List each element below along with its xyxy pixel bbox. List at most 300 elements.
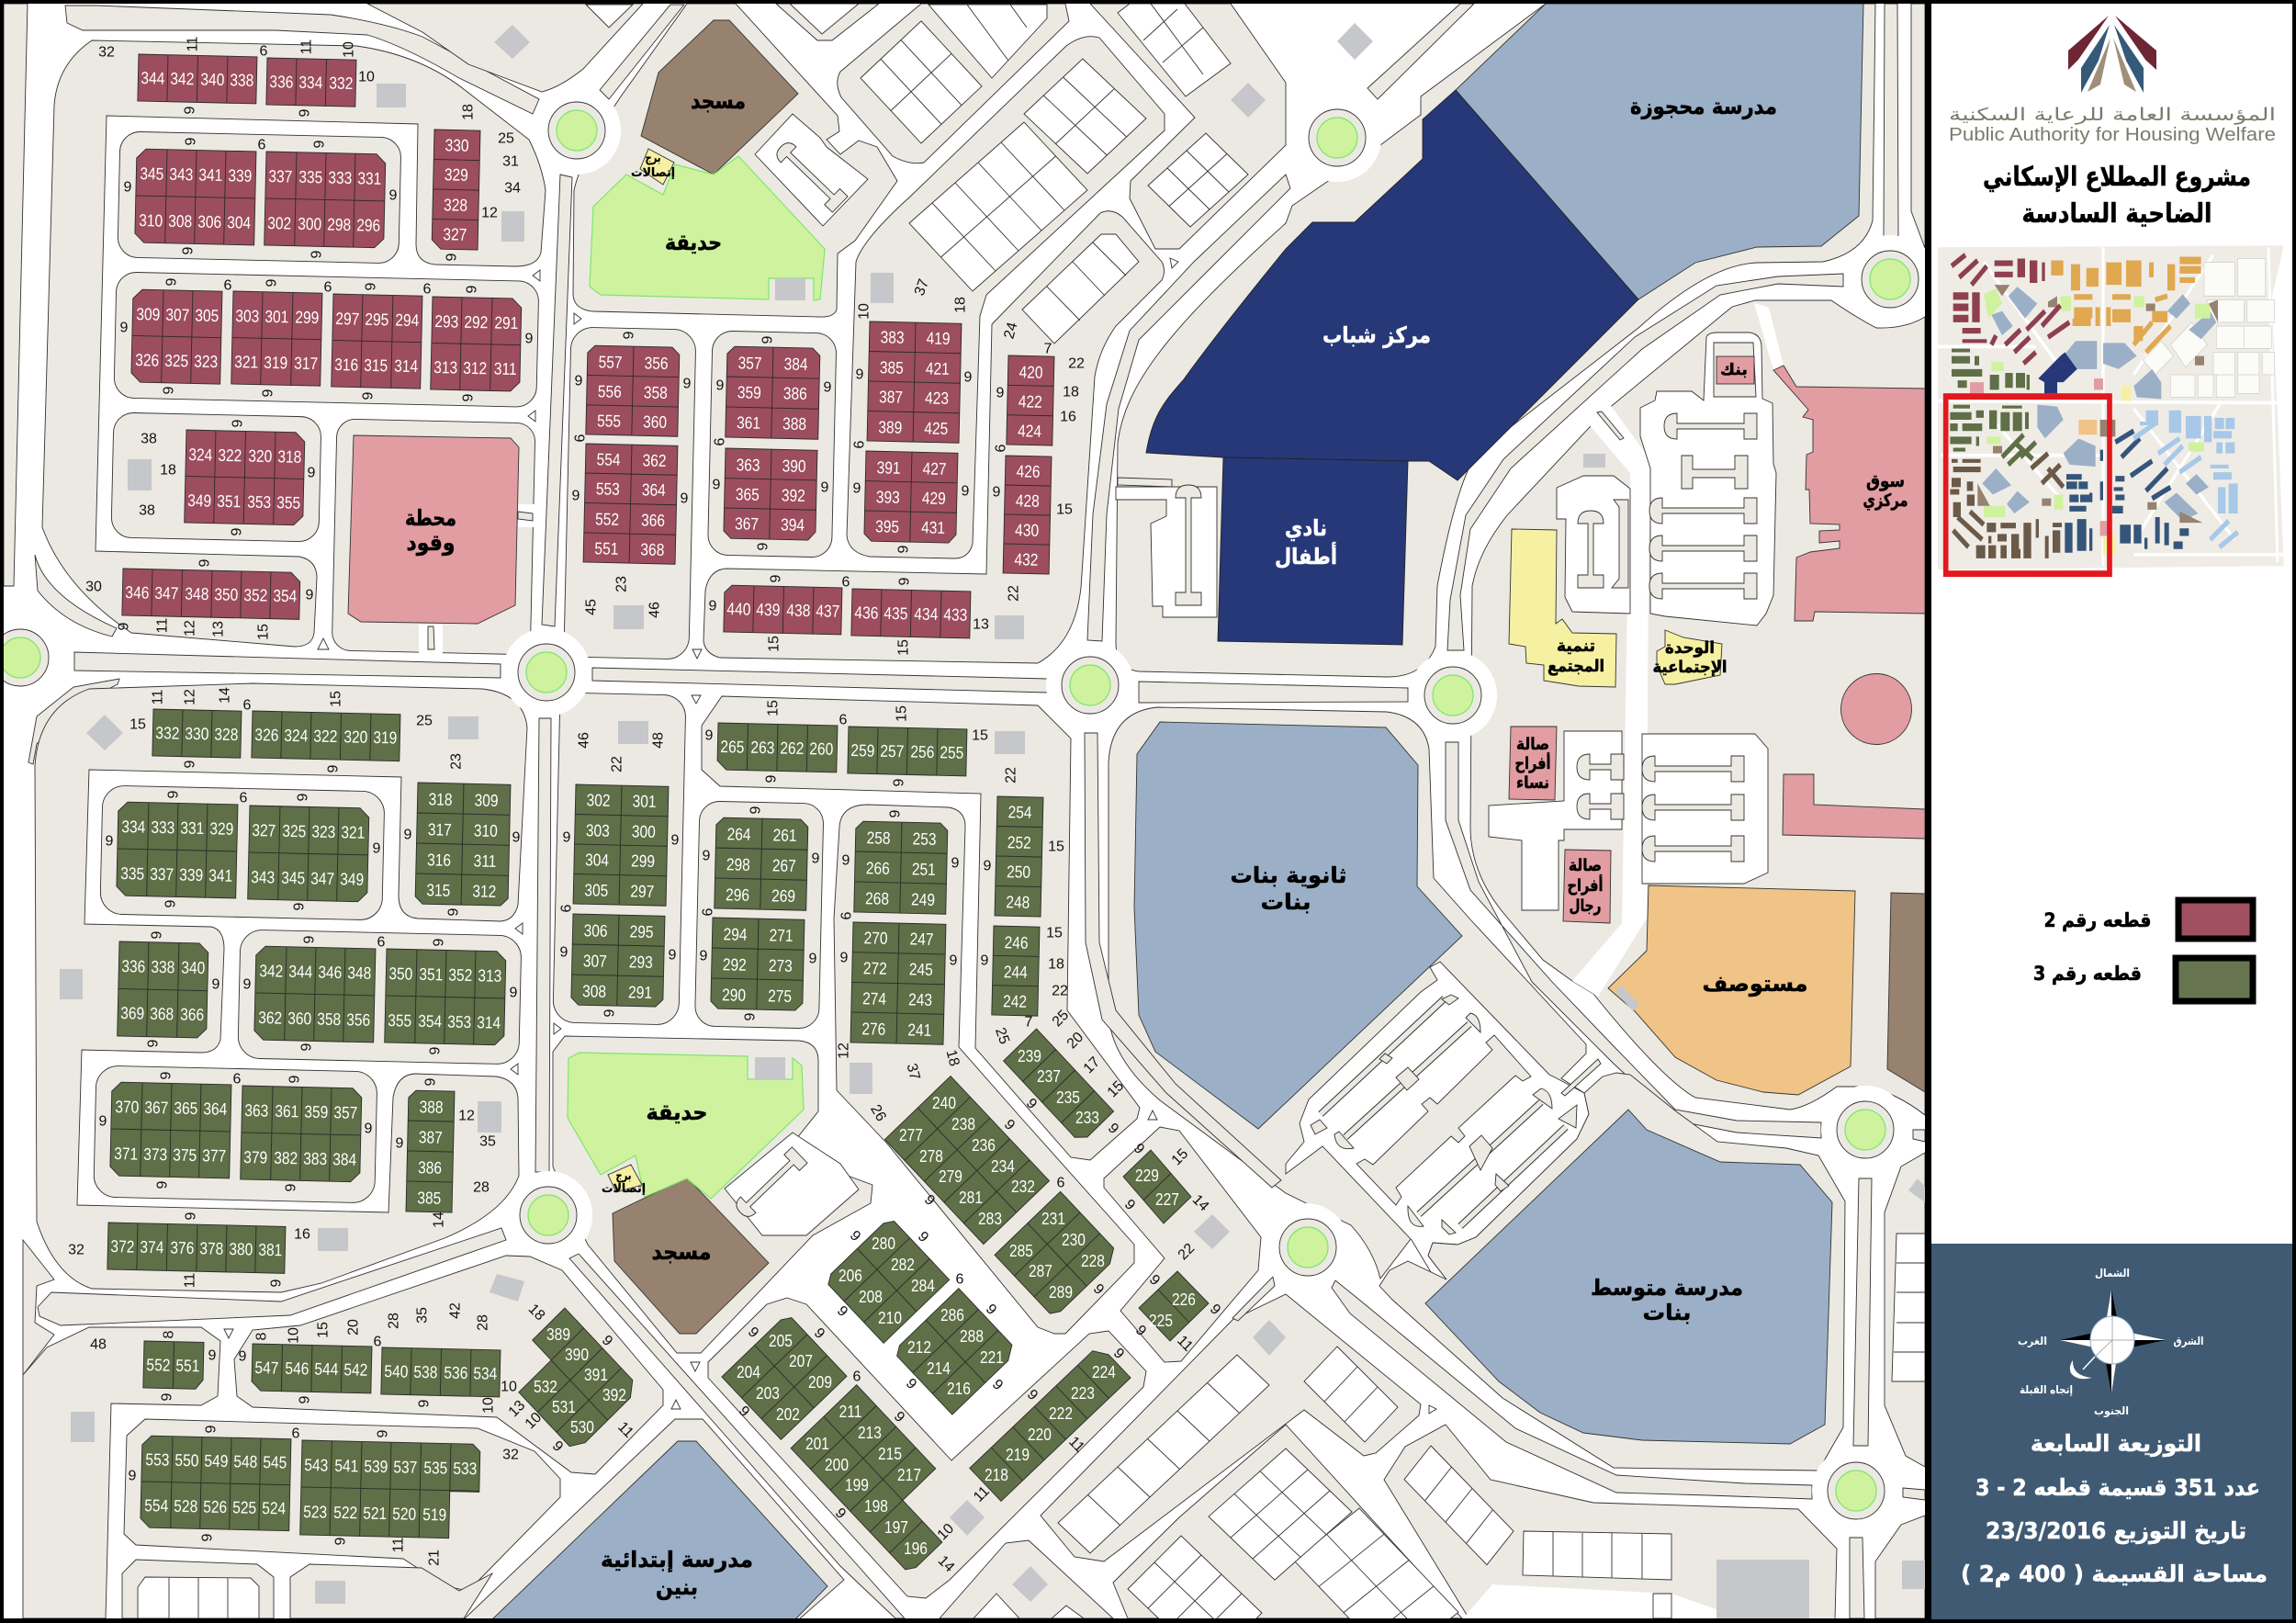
gray box in north park xyxy=(775,278,805,300)
lots: 436-433: 436 xyxy=(854,603,879,623)
dimension labels vertical: 45 xyxy=(584,599,599,615)
lots: diagonal 240-283: 283 xyxy=(978,1210,1002,1228)
label: boys primary school: مدرسة إبتدائية xyxy=(601,1547,753,1572)
dimension labels horizontal: 9 xyxy=(962,483,970,500)
lots: 553-524: 545 xyxy=(263,1453,287,1472)
lots: block 3 row 332-328: 330 xyxy=(185,725,209,744)
lots: 547-542: 546 xyxy=(285,1359,310,1379)
lots: diagonal 211-196: 199 xyxy=(845,1476,869,1494)
organisation name english: Public Authority for Housing Welfare xyxy=(1949,125,2276,145)
key map xyxy=(1938,245,2284,574)
dimension labels vertical: 9 xyxy=(180,246,197,254)
label: fuel station: محطة xyxy=(405,505,456,531)
lots: 270-241 xyxy=(850,922,946,1044)
lots: 270-241: 247 xyxy=(909,930,934,949)
dimension labels horizontal: 9 xyxy=(243,977,252,992)
plot area: مساحة القسيمة ( 400 م2 ) xyxy=(1961,1561,2268,1587)
dimension labels diagonal: 9 xyxy=(989,1377,1006,1393)
lots: 440-437: 440 xyxy=(726,600,751,619)
dimension labels diagonal: 9 xyxy=(1001,1117,1018,1133)
dimension labels vertical: 9 xyxy=(621,331,637,339)
lots: 388-385: 388 xyxy=(419,1098,444,1117)
lots: diagonal 389-530: 389 xyxy=(546,1325,570,1344)
dimension labels horizontal: 6 xyxy=(853,1369,861,1385)
lots: 303-317: 303 xyxy=(235,307,260,326)
lots: 543-519: 519 xyxy=(422,1505,446,1525)
dimension labels vertical: 9 xyxy=(162,386,176,394)
lots: diagonal 286-216: 216 xyxy=(947,1380,971,1398)
lots: 264-269: 269 xyxy=(771,886,795,906)
lots: block 2 row 344-338: 338 xyxy=(230,71,254,90)
dimension labels horizontal: 9 xyxy=(856,367,864,382)
lots: 388-385 xyxy=(406,1090,455,1212)
dimension labels horizontal: 9 xyxy=(951,856,960,871)
lots: 426-432: 430 xyxy=(1015,521,1039,540)
lots: diagonal 211-196: 196 xyxy=(904,1539,928,1558)
lots: 557-360: 358 xyxy=(644,383,668,402)
dimension labels horizontal: 9 xyxy=(705,727,714,744)
lots: 324-355: 318 xyxy=(277,447,302,467)
lots: 547-542: 544 xyxy=(314,1359,339,1379)
lots: 337-296: 302 xyxy=(267,214,291,233)
lots: 372-381: 380 xyxy=(229,1240,253,1259)
lots: block 3 row 332-328: 328 xyxy=(214,725,239,744)
lots: 543-519: 541 xyxy=(334,1457,359,1476)
dimension labels horizontal: 34 xyxy=(504,180,521,197)
lots: 554-368: 552 xyxy=(595,510,619,529)
lots: 297-314: 315 xyxy=(364,356,388,376)
dimension labels vertical: 15 xyxy=(895,705,909,722)
lots: 363-384: 379 xyxy=(243,1148,267,1167)
lots: diagonal 205-202: 209 xyxy=(808,1373,832,1392)
lots: 543-519: 522 xyxy=(333,1504,357,1523)
lots: 553-524: 528 xyxy=(174,1497,197,1516)
dimension labels diagonal: 9 xyxy=(1207,1302,1223,1318)
dimension labels horizontal: 48 xyxy=(90,1337,107,1352)
lots: 357-388: 359 xyxy=(737,383,761,402)
lots: 334-341: 335 xyxy=(120,864,144,884)
lots: diagonal 239-233 xyxy=(1004,1029,1114,1144)
lots: 391-431: 427 xyxy=(922,459,947,479)
lots: diagonal 239-233: 239 xyxy=(1018,1047,1041,1065)
dimension labels horizontal: 12 xyxy=(481,206,498,220)
lots: 254-248: 252 xyxy=(1007,833,1031,852)
label: central market xyxy=(1863,471,1908,512)
lots: 543-519: 533 xyxy=(453,1459,478,1479)
lots: 557-360: 356 xyxy=(644,354,669,373)
lots: 350-314: 350 xyxy=(388,964,413,984)
lots: 372-381: 381 xyxy=(258,1240,283,1260)
girls intermediate school xyxy=(1425,1110,1832,1444)
dimension labels horizontal: 28 xyxy=(473,1179,490,1196)
gray service boxes xyxy=(60,23,1925,1618)
lots: 264-269: 298 xyxy=(726,855,750,874)
lots: 303-317: 301 xyxy=(264,308,289,327)
dimension labels vertical: 9 xyxy=(755,542,771,550)
dimension labels horizontal: 9 xyxy=(821,479,829,496)
lots: 540-534: 540 xyxy=(384,1362,409,1381)
dimension labels horizontal: 32 xyxy=(98,44,115,61)
label: central market: سوق xyxy=(1866,471,1905,491)
lots: diagonal 229-227 xyxy=(1123,1150,1191,1223)
label: boys primary school xyxy=(601,1547,753,1600)
lots: 547-542: 547 xyxy=(254,1358,279,1378)
dimension labels diagonal: 9 xyxy=(1110,1346,1127,1362)
dimension labels horizontal: 38 xyxy=(141,432,157,446)
lots: 383-425: 389 xyxy=(878,418,903,437)
dimension labels diagonal: 11 xyxy=(1174,1333,1196,1355)
dimension labels horizontal: 6 xyxy=(260,44,268,59)
dimension labels horizontal: 6 xyxy=(243,698,252,713)
lots: 557-360: 556 xyxy=(598,382,622,401)
dimension labels horizontal: 15 xyxy=(1056,502,1073,518)
gray box in south park xyxy=(755,1057,785,1080)
lots: 336-332 xyxy=(266,58,356,107)
dimension labels horizontal: 16 xyxy=(1060,410,1076,424)
dimension labels vertical: 6 xyxy=(573,434,588,442)
dimension labels vertical: 8 xyxy=(253,1332,270,1340)
lots: diagonal 226-225 xyxy=(1139,1271,1209,1341)
dimension labels vertical: 28 xyxy=(476,1314,490,1331)
dimension labels diagonal: 14 xyxy=(1189,1192,1211,1214)
dimension labels diagonal: 9 xyxy=(1131,1141,1147,1157)
dimension labels vertical: 9 xyxy=(364,282,378,290)
lots: 306-291: 307 xyxy=(583,952,607,971)
dimension labels vertical: 12 xyxy=(182,620,198,637)
lots: 326-319: 326 xyxy=(254,726,279,745)
dimension labels horizontal: 38 xyxy=(139,503,155,518)
dimension labels horizontal: 7 xyxy=(1025,1014,1033,1031)
lots: 309-323: 305 xyxy=(195,306,219,325)
dimension labels horizontal: 9 xyxy=(396,1135,404,1152)
compass labels: الشرق xyxy=(2173,1335,2204,1347)
dimension labels vertical: 9 xyxy=(325,764,342,772)
lots: 303-317 xyxy=(231,291,322,386)
lots: diagonal 224-218: 224 xyxy=(1092,1363,1116,1381)
lots: 554-368: 364 xyxy=(642,480,666,500)
lots: 318-312 xyxy=(415,783,511,906)
lots: 326-319: 324 xyxy=(284,727,309,746)
lots: 346-354: 346 xyxy=(125,583,150,603)
dimension labels diagonal: 9 xyxy=(832,1505,849,1522)
dimension labels horizontal: 9 xyxy=(120,320,129,336)
lots: 391-431: 431 xyxy=(921,518,945,537)
dimension labels horizontal: 9 xyxy=(669,948,677,963)
dimension labels vertical: 9 xyxy=(296,793,310,801)
lots: 553-524: 524 xyxy=(262,1499,286,1518)
label: park south: حديقة xyxy=(647,1099,707,1125)
dimension labels diagonal: 9 xyxy=(1121,1197,1138,1213)
lots: 345-304: 310 xyxy=(139,211,163,231)
lots: diagonal 211-196: 200 xyxy=(825,1456,849,1474)
dimension labels diagonal: 26 xyxy=(867,1102,889,1124)
lots: 357-388: 388 xyxy=(782,414,806,434)
label: girls intermediate school: مدرسة متوسط xyxy=(1591,1275,1743,1301)
lots: 426-432: 428 xyxy=(1016,491,1040,511)
lots: 334-341: 341 xyxy=(208,866,232,885)
lots: 265-260: 263 xyxy=(750,738,775,758)
dimension labels vertical: 9 xyxy=(165,790,182,798)
lots: 334-341: 334 xyxy=(121,817,146,837)
lots: diagonal 389-530: 390 xyxy=(565,1346,589,1364)
lots: diagonal 211-196: 197 xyxy=(884,1518,908,1537)
dimension labels horizontal: 9 xyxy=(984,858,992,874)
lots: 554-368: 551 xyxy=(594,539,619,558)
label: social unit: الوحدة xyxy=(1665,638,1715,658)
compass labels: الغرب xyxy=(2018,1335,2047,1347)
dimension labels horizontal: 9 xyxy=(709,599,717,614)
lots: diagonal 229-227: 227 xyxy=(1155,1190,1179,1209)
dimension labels diagonal: 11 xyxy=(1065,1434,1087,1456)
lots: 293-311: 313 xyxy=(433,358,457,378)
lots: 246-242 xyxy=(992,926,1040,1016)
lots: 557-360 xyxy=(586,345,680,436)
women's wedding hall xyxy=(1509,727,1557,800)
lots: 342-356: 348 xyxy=(347,964,372,983)
dimension labels vertical: 9 xyxy=(301,935,318,943)
dimension labels vertical: 9 xyxy=(309,250,325,258)
compass labels xyxy=(2018,1267,2204,1418)
dimension labels vertical: 28 xyxy=(386,1313,402,1329)
lots: block 2 row 344-338 xyxy=(138,54,257,104)
lots: 350-314: 353 xyxy=(447,1012,471,1031)
lots: 336-366: 369 xyxy=(120,1004,144,1023)
dimension labels horizontal: 18 xyxy=(1063,384,1079,400)
lots: 309-323: 326 xyxy=(135,351,159,370)
reserved school xyxy=(1456,4,1863,299)
dimension labels vertical: 9 xyxy=(292,902,307,910)
lots: 337-296: 296 xyxy=(356,216,380,235)
lots: 302-297 xyxy=(573,784,669,906)
dimension labels vertical: 9 xyxy=(160,1392,174,1401)
lots: 350-314: 354 xyxy=(418,1012,442,1031)
distribution heading: التوزيعة السابعة xyxy=(2031,1430,2201,1458)
lots: diagonal 389-530: 530 xyxy=(570,1418,594,1437)
lots: 383-425 xyxy=(867,321,962,443)
dimension labels vertical: 11 xyxy=(186,37,200,51)
lots: 302-297: 302 xyxy=(586,791,611,810)
dimension labels diagonal: 9 xyxy=(1105,1121,1121,1137)
lots: 293-311: 293 xyxy=(434,312,459,332)
lots: 370-377: 375 xyxy=(173,1145,197,1165)
lots: 327-349: 325 xyxy=(282,822,307,841)
lots: 383-425: 385 xyxy=(880,358,904,378)
brown plot east xyxy=(1887,893,1925,1092)
dimension labels vertical: 6 xyxy=(700,907,716,916)
lots: 337-296 xyxy=(264,152,386,248)
dimension labels vertical: 9 xyxy=(887,809,904,817)
dimension labels vertical: 9 xyxy=(428,1046,443,1054)
lots: 345-304: 341 xyxy=(198,165,223,185)
lots: diagonal 211-196: 217 xyxy=(897,1466,921,1484)
dimension labels vertical: 14 xyxy=(432,1212,446,1228)
dimension labels horizontal: 9 xyxy=(389,187,398,204)
lots: diagonal 205-202 xyxy=(722,1313,847,1439)
lots: 254-248: 248 xyxy=(1006,893,1030,912)
dimension labels horizontal: 9 xyxy=(365,1121,373,1137)
dimension labels vertical: 9 xyxy=(891,778,907,786)
dimension labels horizontal: 15 xyxy=(129,716,146,733)
lots: 309-323: 307 xyxy=(165,306,190,325)
lots: diagonal 224-218: 220 xyxy=(1028,1426,1052,1444)
label: men's wedding hall: رجال xyxy=(1569,896,1602,916)
dimension labels diagonal: 9 xyxy=(1090,1281,1107,1298)
lots: 543-519: 543 xyxy=(304,1456,329,1475)
lots: 337-296: 333 xyxy=(328,168,353,187)
dimension labels horizontal: 9 xyxy=(842,852,850,869)
clinic xyxy=(1608,885,1855,1095)
lots: 426-432: 426 xyxy=(1016,462,1041,481)
dimension labels vertical: 9 xyxy=(332,1537,349,1545)
lots: 258-249: 266 xyxy=(866,859,890,878)
dimension labels diagonal: 37 xyxy=(912,277,932,298)
dimension labels diagonal: 9 xyxy=(891,1409,907,1426)
pink circle plot xyxy=(1840,674,1912,744)
lots: 327-349: 347 xyxy=(310,869,334,888)
lots: 363-384: 382 xyxy=(274,1149,298,1168)
lots: 337-296: 331 xyxy=(357,169,382,188)
lots: 552-551 xyxy=(143,1341,204,1389)
lots: 363-384: 359 xyxy=(304,1102,329,1121)
lots: 327-349: 343 xyxy=(251,868,275,887)
dimension labels horizontal: 9 xyxy=(510,985,518,1001)
lots: 363-394: 367 xyxy=(735,514,759,534)
lots: diagonal 280-210: 206 xyxy=(838,1267,862,1285)
dimension labels diagonal: 25 xyxy=(1050,1008,1072,1030)
lots: 270-241: 274 xyxy=(862,989,886,1009)
lots: 363-394: 394 xyxy=(781,515,805,535)
lots: diagonal 240-283: 277 xyxy=(899,1126,923,1144)
lots: 327-349: 345 xyxy=(281,869,305,888)
lots: 336-332: 334 xyxy=(298,73,323,93)
dimension labels vertical: 15 xyxy=(255,624,272,640)
lots: diagonal 231-289: 289 xyxy=(1049,1283,1073,1302)
lots: 345-304: 343 xyxy=(169,165,194,185)
lots: 309-323: 323 xyxy=(194,352,218,371)
dimension labels vertical: 9 xyxy=(360,391,377,400)
dimension labels vertical: 9 xyxy=(283,1183,299,1191)
lots: 440-437: 439 xyxy=(756,601,781,620)
lots: 543-519: 539 xyxy=(364,1457,388,1476)
lots: 318-312: 315 xyxy=(426,881,451,900)
label: community development: تنمية xyxy=(1557,637,1595,656)
dimension labels horizontal: 9 xyxy=(713,478,721,492)
lots: 372-381: 372 xyxy=(110,1237,135,1257)
lots: 345-304: 304 xyxy=(227,213,251,232)
title xyxy=(1983,161,2251,229)
lots: 342-356: 362 xyxy=(258,1009,282,1028)
dimension labels horizontal: 9 xyxy=(404,827,412,843)
dimension labels horizontal: 9 xyxy=(563,830,571,845)
dimension labels vertical xyxy=(116,37,1021,1566)
lots: 342-356: 356 xyxy=(346,1010,370,1030)
label: telecom tower south xyxy=(602,1169,646,1196)
dimension labels diagonal: 9 xyxy=(915,1229,931,1245)
lots: diagonal 240-283 xyxy=(884,1076,1049,1245)
lots: 357-388: 357 xyxy=(737,354,762,373)
lots: diagonal 239-233: 237 xyxy=(1037,1067,1061,1086)
dimension labels horizontal: 25 xyxy=(498,130,514,147)
lots: 259-255: 255 xyxy=(940,743,964,762)
dimension labels vertical: 10 xyxy=(481,1397,496,1414)
lots: 309-323: 325 xyxy=(164,352,188,371)
lots: 264-269: 267 xyxy=(772,856,796,875)
lots: 554-368: 554 xyxy=(596,450,621,469)
lots: diagonal 224-218: 218 xyxy=(985,1466,1008,1484)
lots: 246-242: 242 xyxy=(1003,992,1027,1011)
dimension labels diagonal: 9 xyxy=(1024,1387,1041,1403)
lots: 324-355: 351 xyxy=(217,492,241,512)
lots: 324-355 xyxy=(185,430,305,525)
lots: 350-314: 313 xyxy=(478,966,502,986)
lots: 363-384: 357 xyxy=(333,1103,358,1122)
lots: diagonal 389-530: 532 xyxy=(534,1378,557,1396)
lots: 370-377: 377 xyxy=(202,1146,226,1166)
dimension labels vertical: 9 xyxy=(197,558,213,567)
dimension labels vertical: 9 xyxy=(163,277,180,286)
lots: 543-519: 537 xyxy=(393,1458,418,1477)
dimension labels horizontal: 35 xyxy=(479,1133,496,1150)
dimension labels vertical: 23 xyxy=(448,753,465,770)
bank xyxy=(1716,356,1754,384)
lots: diagonal 240-283: 278 xyxy=(919,1147,943,1166)
lots: diagonal 205-202: 203 xyxy=(756,1384,780,1403)
lots: 337-296: 300 xyxy=(298,215,321,234)
lots: 337-296: 337 xyxy=(268,167,293,186)
lots: 391-431: 391 xyxy=(876,458,901,478)
lots: 293-311: 312 xyxy=(463,359,487,378)
dimension labels vertical: 10 xyxy=(856,303,872,320)
dimension labels vertical: 9 xyxy=(461,393,476,401)
lots: 302-297: 297 xyxy=(630,882,655,901)
dimension labels horizontal: 9 xyxy=(683,377,692,391)
lots: 326-319 xyxy=(252,711,400,761)
gray box on clinic xyxy=(1615,985,1639,1011)
lots: 345-304: 306 xyxy=(197,212,221,231)
men's wedding hall xyxy=(1563,850,1611,923)
lots: diagonal 239-233: 235 xyxy=(1056,1088,1080,1107)
dimension labels vertical: 6 xyxy=(994,444,1008,452)
lots: 363-384: 383 xyxy=(303,1149,327,1168)
dimension labels vertical: 9 xyxy=(145,1039,162,1047)
dimension labels diagonal: 9 xyxy=(921,1192,938,1209)
lots: 334-341: 331 xyxy=(180,818,205,838)
compass labels: الشمال xyxy=(2095,1267,2130,1279)
lots: diagonal 231-289: 228 xyxy=(1081,1252,1105,1270)
kids club xyxy=(1218,457,1408,645)
lots: 254-248 xyxy=(995,796,1043,917)
lots: 426-432: 432 xyxy=(1014,550,1039,569)
lots: 547-542: 542 xyxy=(343,1360,368,1380)
dimension labels horizontal: 6 xyxy=(224,277,232,294)
lots: 363-394: 365 xyxy=(736,485,760,504)
lots: 303-317: 321 xyxy=(234,353,258,372)
label: girls secondary school: بنات xyxy=(1260,889,1311,915)
distribution date: تاريخ التوزيع 23/3/2016 xyxy=(1986,1517,2246,1545)
label: community development xyxy=(1548,637,1604,676)
lots: 557-360: 557 xyxy=(598,353,623,372)
lots: 259-255: 257 xyxy=(880,742,905,761)
label: social unit: الإجتماعية xyxy=(1653,658,1727,677)
dimension labels vertical: 9 xyxy=(163,899,178,907)
dimension labels vertical: 9 xyxy=(149,930,165,939)
lots: 293-311: 291 xyxy=(494,313,519,332)
lots: 370-377: 371 xyxy=(114,1144,138,1164)
lots: 346-354: 347 xyxy=(154,584,179,603)
lots: 294-275: 292 xyxy=(723,955,747,975)
dimension labels vertical: 11 xyxy=(299,39,314,54)
lots: 265-260: 265 xyxy=(720,738,745,757)
